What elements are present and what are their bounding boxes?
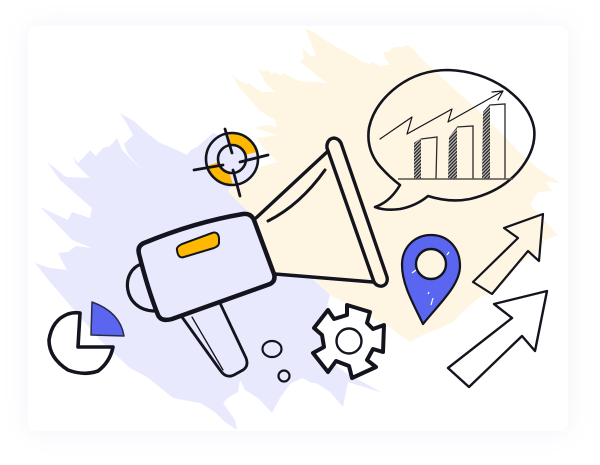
lower arrow	[448, 291, 547, 387]
upper arrow	[473, 214, 543, 294]
brush stroke: lavender	[35, 113, 383, 430]
gear icon	[313, 305, 384, 378]
target icon	[194, 129, 268, 196]
speech bubble outline	[368, 70, 534, 210]
megaphone	[127, 138, 387, 376]
megaphone button	[177, 233, 219, 257]
megaphone rear cap	[127, 264, 154, 311]
pie chart icon	[49, 302, 124, 373]
brush stroke: cream	[228, 28, 560, 342]
megaphone body	[139, 214, 274, 320]
bubbles	[262, 341, 290, 382]
megaphone handle	[182, 303, 247, 376]
growth arrow	[380, 91, 503, 139]
speech bubble with bar chart	[368, 70, 534, 210]
bar chart	[398, 104, 513, 179]
pie blue slice	[91, 302, 124, 336]
pie main piece	[49, 313, 113, 373]
megaphone cone	[256, 138, 387, 286]
card background	[28, 26, 568, 431]
location pin	[402, 235, 460, 324]
